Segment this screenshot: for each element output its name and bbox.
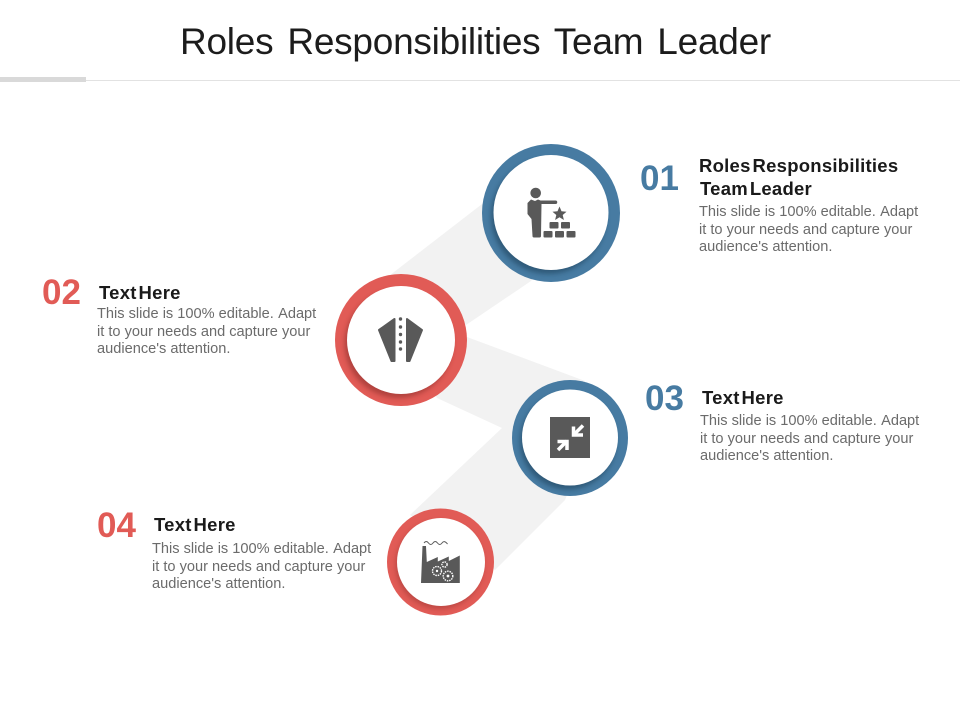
node 02 ring xyxy=(335,274,467,406)
body 04: audience's attention. xyxy=(152,576,285,592)
body 01: This slide is 100% editable. Adapt xyxy=(699,204,918,220)
node 01 ring xyxy=(482,144,620,282)
item 01 xyxy=(640,155,918,255)
number 03: 03 xyxy=(645,379,684,418)
body 02: it to your needs and capture your xyxy=(97,324,310,340)
number 02: 02 xyxy=(42,273,81,312)
heading 04: Text Here xyxy=(154,514,236,535)
process diagram xyxy=(335,144,628,616)
body 04: This slide is 100% editable. Adapt xyxy=(152,541,371,557)
heading 02: Text Here xyxy=(99,282,181,303)
item 02 xyxy=(42,273,316,357)
body 03 xyxy=(700,413,920,464)
heading 01: Roles Responsibilities xyxy=(699,155,898,176)
body 03: it to your needs and capture your xyxy=(700,431,913,447)
title rule xyxy=(0,77,960,82)
body 04 xyxy=(152,541,372,592)
body 04: it to your needs and capture your xyxy=(152,559,365,575)
body 03: This slide is 100% editable. Adapt xyxy=(700,413,919,429)
body 01: audience's attention. xyxy=(699,239,832,255)
body 02 xyxy=(97,306,316,357)
body 03: audience's attention. xyxy=(700,448,833,464)
icon: leader with star and blocks xyxy=(528,188,576,238)
icon: folded lapels xyxy=(379,317,422,361)
body 01: it to your needs and capture your xyxy=(699,222,912,238)
icon: factory with gears xyxy=(421,542,460,583)
node 04 ring xyxy=(387,508,494,616)
node 03 ring xyxy=(512,380,628,496)
icon: compress arrows xyxy=(550,417,590,458)
ribbon connectors xyxy=(385,194,590,570)
heading 01: Team Leader xyxy=(700,178,812,199)
heading 01 xyxy=(699,155,898,199)
body 01 xyxy=(699,204,918,255)
number 01: 01 xyxy=(640,159,679,198)
title: Roles Responsibilities Team Leader xyxy=(180,20,771,62)
heading 03: Text Here xyxy=(702,387,784,408)
number 04: 04 xyxy=(97,506,136,545)
body 02: audience's attention. xyxy=(97,341,230,357)
item 03 xyxy=(645,379,920,464)
item 04 xyxy=(97,506,372,592)
body 02: This slide is 100% editable. Adapt xyxy=(97,306,316,322)
